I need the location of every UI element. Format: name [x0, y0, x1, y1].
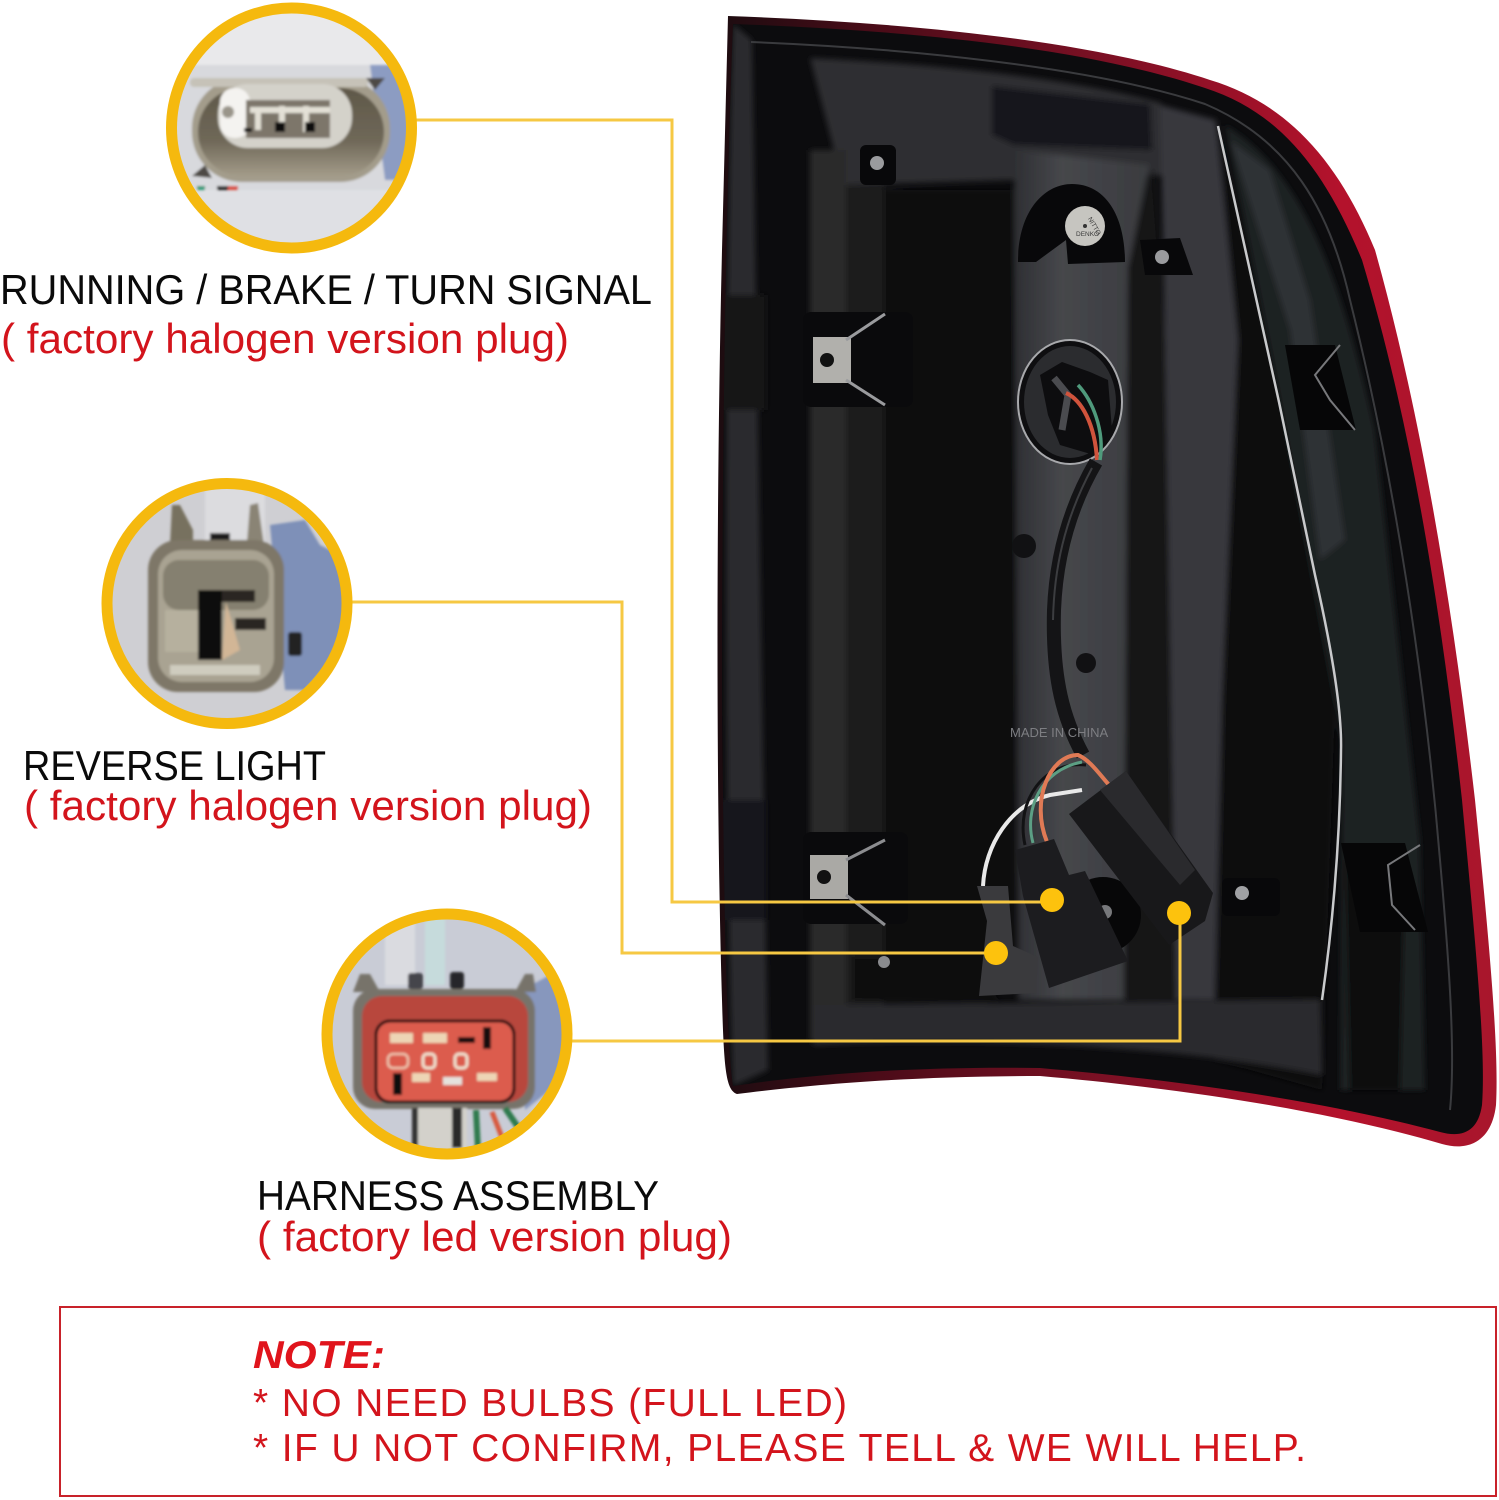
- plug circle: running brake turn signal: [165, 8, 420, 258]
- note line 2: * IF U NOT CONFIRM, PLEASE TELL & WE WILL HELP.: [253, 1427, 1306, 1470]
- label: running brake turn signal: [0, 266, 652, 362]
- dark band right of center: [1124, 165, 1178, 1000]
- connector: reverse light: [352, 602, 1008, 965]
- label: running brake turn signal: ( factory halogen version plug): [1, 315, 569, 362]
- label: running brake turn signal: RUNNING / BRAKE / TURN SIGNAL: [0, 266, 652, 313]
- tail light photo: [718, 16, 1497, 1146]
- back plate top panel: [810, 58, 1175, 185]
- bottom panel: [813, 1000, 1322, 1075]
- connector: harness assembly: [572, 901, 1191, 1041]
- note box: [60, 1307, 1496, 1496]
- black housing: [722, 24, 1483, 1134]
- dark recess at top: [992, 86, 1152, 150]
- note line 1: * NO NEED BULBS (FULL LED): [253, 1382, 847, 1425]
- label: harness assembly: HARNESS ASSEMBLY: [257, 1172, 659, 1219]
- label: reverse light: ( factory halogen version plug): [24, 782, 592, 829]
- lower right black channel: [1345, 860, 1405, 1090]
- made in china mark: MADE IN CHINA: [1010, 725, 1109, 740]
- left channel: [846, 185, 884, 1005]
- bulb mount cover: [1018, 184, 1125, 264]
- red lens rim: [718, 16, 1497, 1146]
- note heading: NOTE:: [253, 1334, 385, 1377]
- grey rib: [1160, 105, 1238, 1000]
- plug circle: reverse light: [107, 484, 350, 724]
- label: reverse light: REVERSE LIGHT: [23, 742, 326, 789]
- connectors: [977, 771, 1213, 996]
- center raised panel: [1014, 150, 1150, 1000]
- label: harness assembly: [257, 1172, 732, 1260]
- outer dark edge line: [751, 42, 1452, 1110]
- outer frame band: [726, 24, 768, 1086]
- screws: [860, 145, 1280, 968]
- bulb mount cover: DENKO: [1076, 231, 1099, 238]
- bulb mount cover: NITTO: [1086, 216, 1102, 236]
- left grey strip: [810, 150, 846, 1040]
- upper right grey patch: [1230, 140, 1345, 560]
- label: harness assembly: ( factory led version plug): [257, 1213, 732, 1260]
- harness wires: [983, 755, 1110, 886]
- main cable: [1054, 462, 1096, 755]
- bulb socket: [1018, 340, 1122, 464]
- label: reverse light: [23, 742, 592, 829]
- socket wires: [1066, 385, 1101, 460]
- right grey band: [1225, 125, 1425, 1090]
- white highlight rib: [1218, 126, 1341, 1000]
- plug circle: harness assembly: [327, 914, 575, 1154]
- right dark area: [1218, 234, 1240, 894]
- clips: [803, 312, 1428, 932]
- connector: running brake turn signal: [415, 120, 1064, 912]
